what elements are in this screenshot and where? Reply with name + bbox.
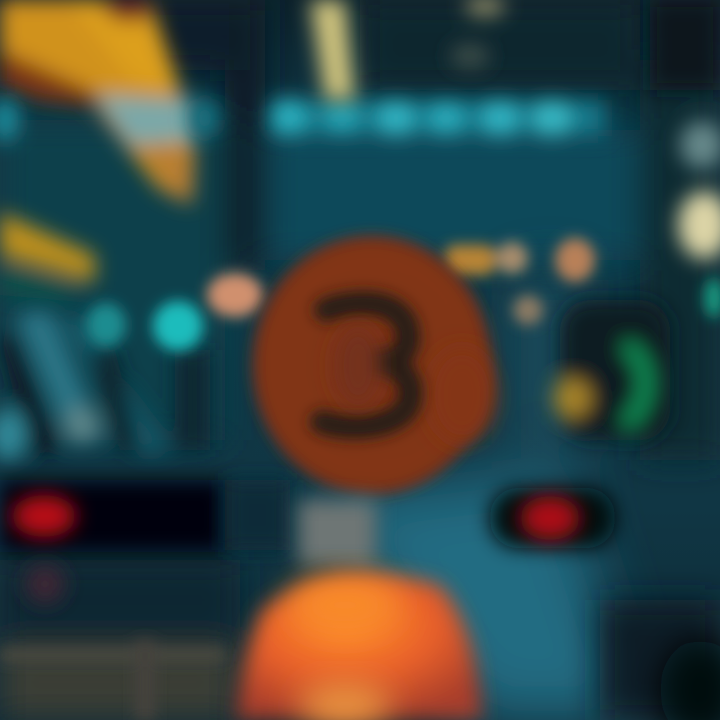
shape: yellow band on left <box>0 212 95 300</box>
icon: bitcoin coin <box>252 235 496 495</box>
panel: left black console with red light <box>0 480 290 604</box>
coin side bulge <box>428 347 496 443</box>
panel: right black console with red light <box>490 488 615 548</box>
shape: diagonal bars on left <box>0 310 210 461</box>
panel: lower left dark floor <box>0 560 720 720</box>
shape: pale pillar under coin <box>298 500 376 565</box>
shape: lower left brown stripes <box>0 640 225 720</box>
lights: right side white glow <box>650 0 720 259</box>
lights: ceiling yellow streak <box>310 0 505 100</box>
shape: glowing orange block <box>236 574 482 720</box>
panel: upper teal wall <box>0 0 720 460</box>
coin disc <box>252 235 492 495</box>
coin centre <box>334 324 382 408</box>
lights: cyan row <box>0 98 605 142</box>
lights: teal dots <box>86 278 720 351</box>
panel: lower right teal floor <box>320 280 640 720</box>
shape: yellow ribbon top left <box>0 0 195 205</box>
coin symbol <box>322 303 411 427</box>
shape: lower right dark corner <box>660 640 720 720</box>
panel: right dark device <box>553 300 670 440</box>
lights: peach and orange bokeh <box>207 238 595 325</box>
